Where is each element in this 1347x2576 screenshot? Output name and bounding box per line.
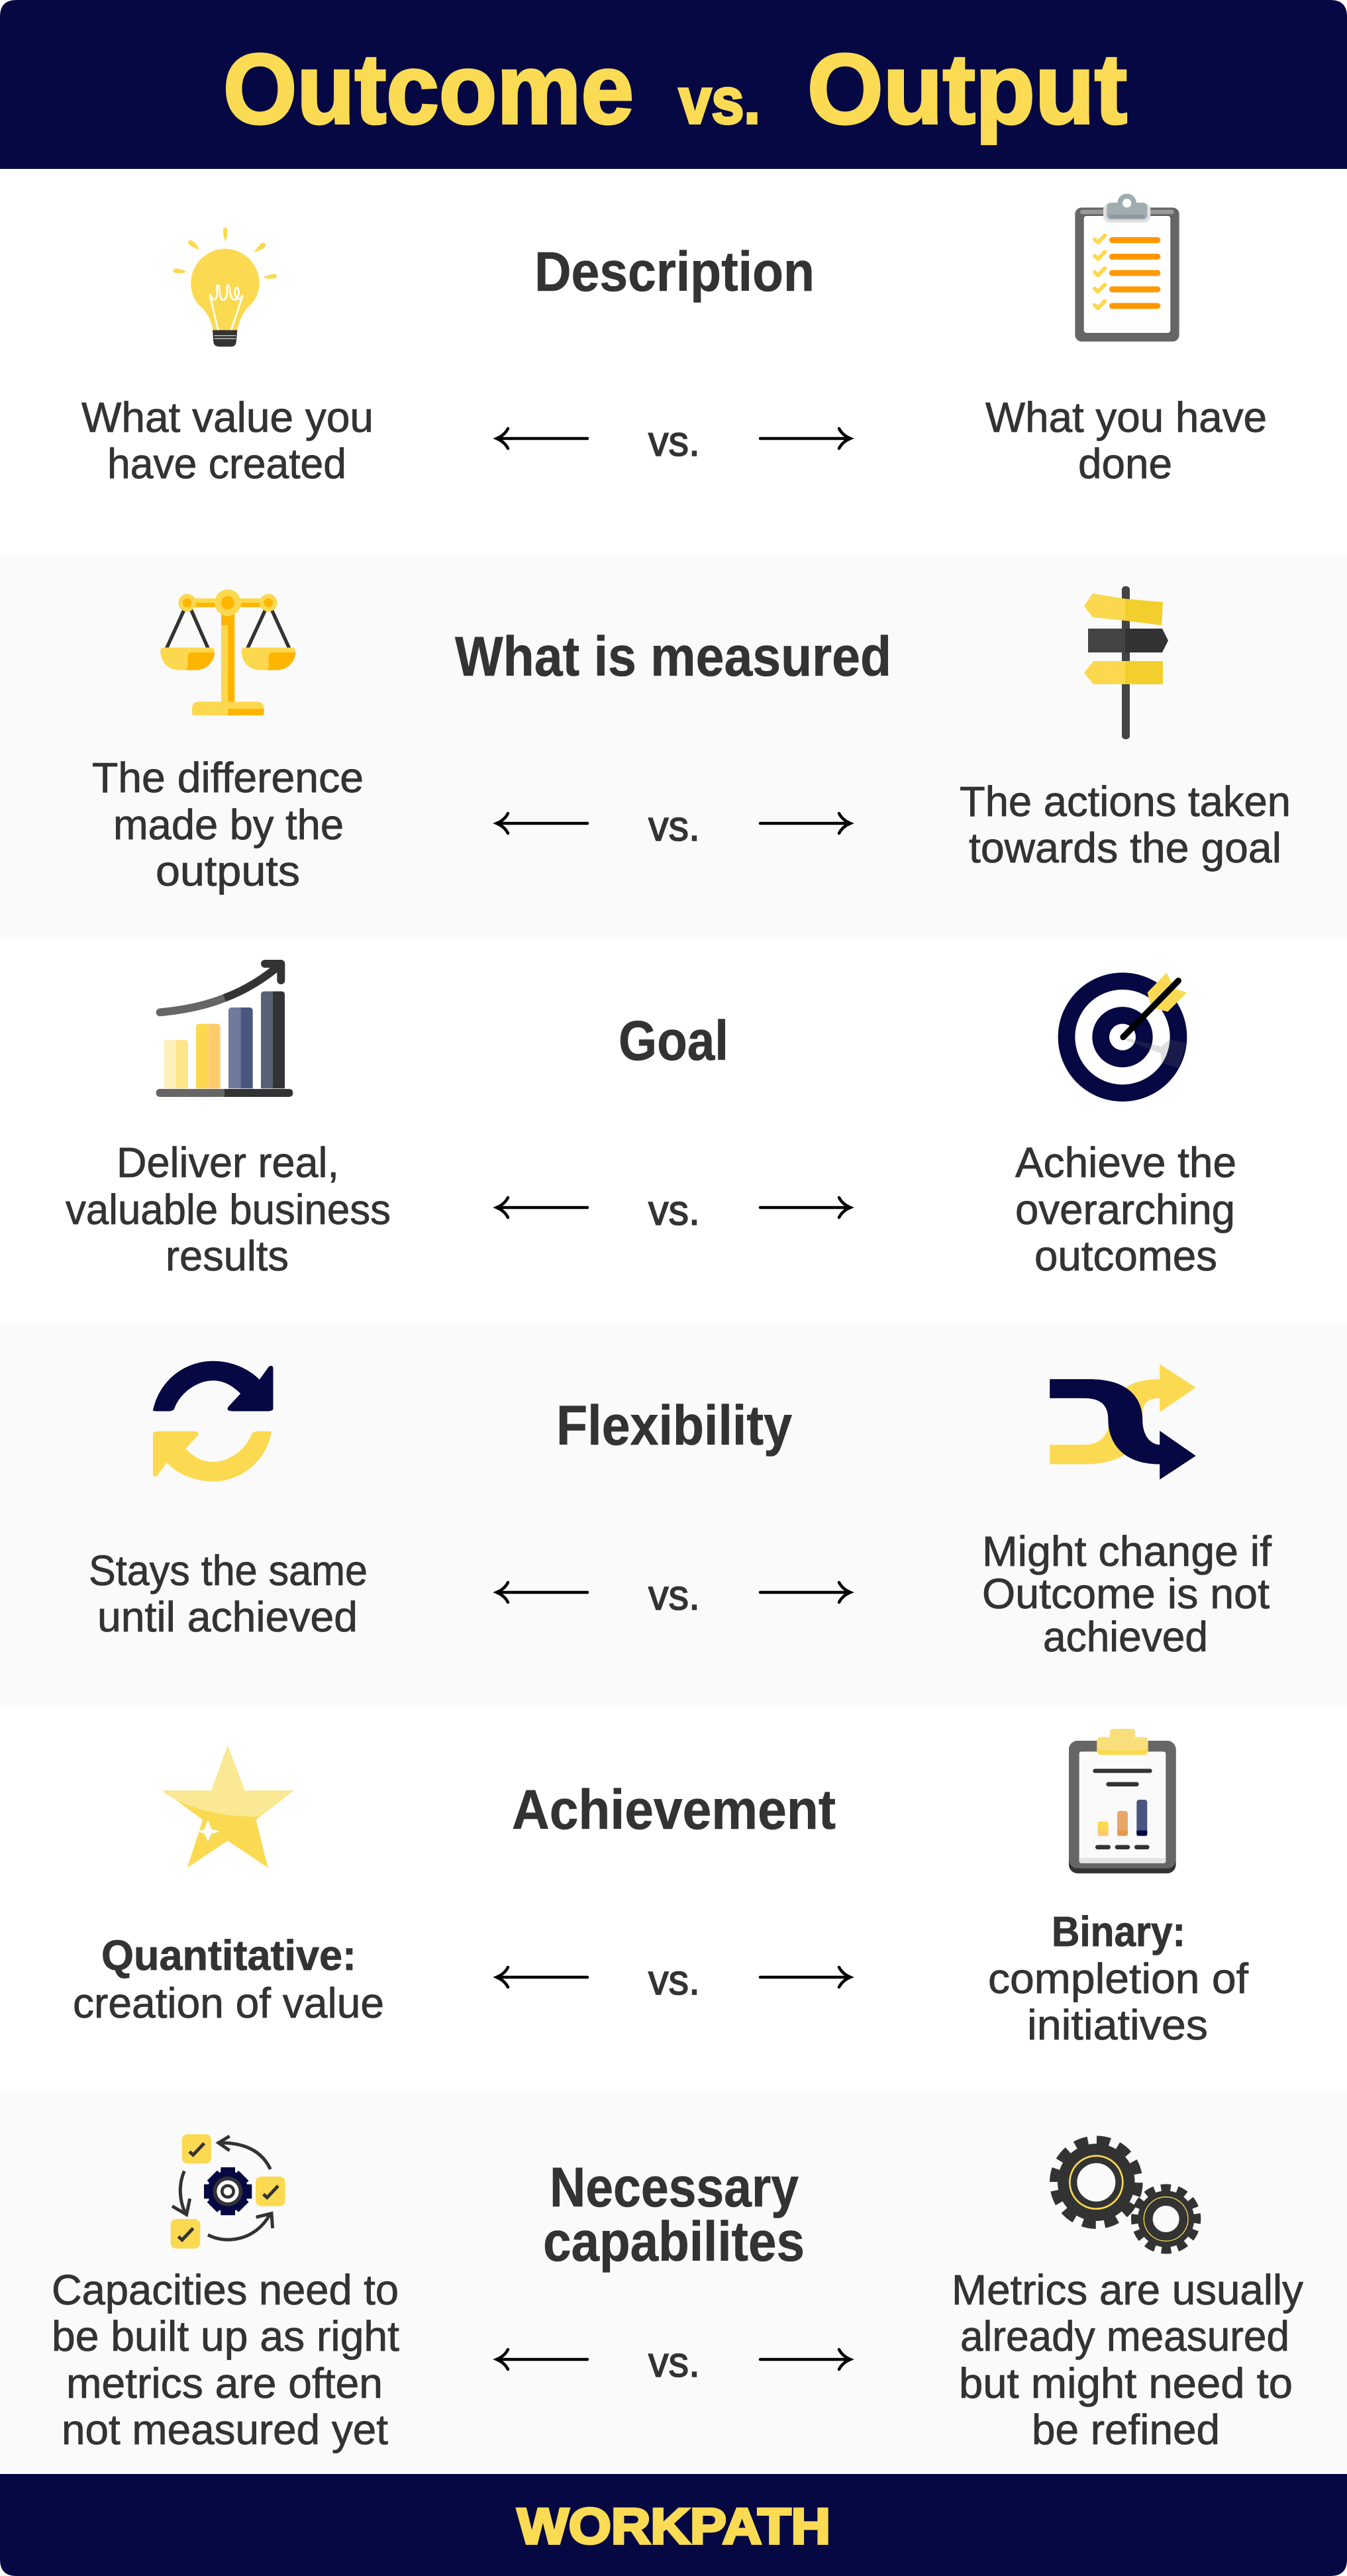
title: Outcome (223, 33, 634, 144)
text: output capabilities: be refined (1032, 2406, 1220, 2453)
text: output measure: towards the goal (969, 824, 1281, 872)
text: outcome achievement: creation of value (73, 1979, 384, 2027)
panel: flexibility (0, 1323, 1347, 1707)
heading: necessary capabilites: capabilites (543, 2210, 805, 2273)
arrows and vs. (497, 1571, 850, 1619)
panel: goal (0, 937, 1347, 1323)
text: output measure: The actions taken (960, 778, 1291, 825)
icon: target with arrow (1058, 972, 1187, 1102)
text: output achievement: Binary: (1052, 1908, 1185, 1955)
panel: what is measured (0, 553, 1347, 937)
icon: balance scale (160, 590, 295, 715)
text: output capabilities: Metrics are usually (952, 2266, 1303, 2314)
text: outcome capabilities (52, 2266, 399, 2453)
text: outcome capabilities: Capacities need to (52, 2266, 399, 2314)
arrows and vs.: vs. (648, 2338, 700, 2386)
brand name: WORKPATH (517, 2499, 830, 2555)
heading: what is measured: What is measured (455, 625, 891, 688)
text: outcome measure (92, 754, 364, 895)
text: output capabilities (952, 2266, 1303, 2453)
text: output flexibility (982, 1527, 1272, 1661)
panel: necessary capabilities (0, 2091, 1347, 2474)
heading: flexibility: Flexibility (556, 1394, 792, 1457)
arrows and vs.: vs. (648, 417, 700, 465)
text: output achievement (988, 1908, 1248, 2049)
title: Output (807, 33, 1127, 144)
text: output achievement: completion of (988, 1955, 1248, 2002)
text: outcome capabilities: be built up as right (52, 2312, 399, 2360)
text: output description: done (1078, 440, 1172, 488)
text: outcome goal: results (166, 1232, 289, 1280)
heading: description: Description (534, 240, 815, 303)
text: output description: What you have (985, 393, 1267, 441)
heading: achievement: Achievement (512, 1778, 836, 1841)
arrows and vs. (497, 802, 850, 850)
icon: signpost (1084, 586, 1168, 739)
arrows and vs.: vs. (648, 1956, 700, 2004)
icon: gears (1054, 2140, 1202, 2255)
arrows and vs.: vs. (648, 802, 700, 850)
heading: necessary capabilites (543, 2156, 805, 2273)
text: output flexibility: achieved (1043, 1613, 1208, 1661)
text: output capabilities: but might need to (959, 2359, 1293, 2407)
text: outcome measure: The difference (92, 754, 364, 801)
heading: necessary capabilites: Necessary (550, 2156, 799, 2218)
arrows and vs. (497, 1186, 850, 1234)
text: outcome description: What value you (81, 393, 374, 441)
icon: light bulb (173, 227, 277, 346)
icon: star (163, 1745, 294, 1868)
icon: refresh arrows (153, 1361, 274, 1482)
text: output capabilities: already measured (960, 2312, 1289, 2360)
text: outcome capabilities: metrics are often (66, 2359, 383, 2407)
heading: goal: Goal (619, 1009, 728, 1072)
text: output flexibility: Might change if (982, 1527, 1272, 1575)
icon: shuffle arrows (1050, 1365, 1196, 1480)
text: outcome description: have created (107, 440, 346, 488)
text: output achievement: initiatives (1027, 2001, 1208, 2049)
arrows and vs. (497, 417, 850, 465)
arrows and vs.: vs. (648, 1186, 700, 1234)
text: outcome goal (66, 1139, 391, 1280)
title: vs. (679, 64, 760, 137)
text: outcome flexibility (89, 1547, 368, 1641)
text: outcome measure: made by the (113, 801, 344, 849)
arrows and vs.: vs. (648, 1571, 700, 1619)
text: output flexibility: Outcome is not (982, 1570, 1270, 1618)
text: outcome flexibility: Stays the same (89, 1547, 368, 1594)
text: output goal: Achieve the (1015, 1139, 1236, 1186)
header banner (0, 0, 1347, 169)
title (223, 33, 1127, 144)
footer banner (0, 2474, 1347, 2576)
text: output measure (960, 778, 1291, 872)
text: outcome flexibility: until achieved (97, 1593, 358, 1641)
text: output goal: overarching (1015, 1186, 1235, 1233)
text: output goal: outcomes (1034, 1232, 1217, 1280)
icon: rising bar chart (156, 964, 293, 1097)
arrows and vs. (497, 2338, 850, 2386)
text: outcome capabilities: not measured yet (62, 2406, 388, 2453)
icon: report clipboard (1069, 1729, 1176, 1873)
text: outcome achievement: Quantitative: (101, 1932, 356, 1979)
text: outcome measure: outputs (156, 847, 300, 895)
icon: checklist clipboard (1075, 193, 1179, 342)
text: outcome achievement (73, 1932, 384, 2027)
text: outcome description (81, 393, 374, 488)
text: output description (985, 393, 1267, 488)
text: output goal (1015, 1139, 1236, 1280)
text: outcome goal: Deliver real, (117, 1139, 339, 1186)
panel: description (0, 169, 1347, 553)
text: outcome goal: valuable business (66, 1186, 391, 1233)
panel: achievement (0, 1707, 1347, 2091)
icon: checklist cycle (171, 2134, 285, 2249)
arrows and vs. (497, 1956, 850, 2004)
